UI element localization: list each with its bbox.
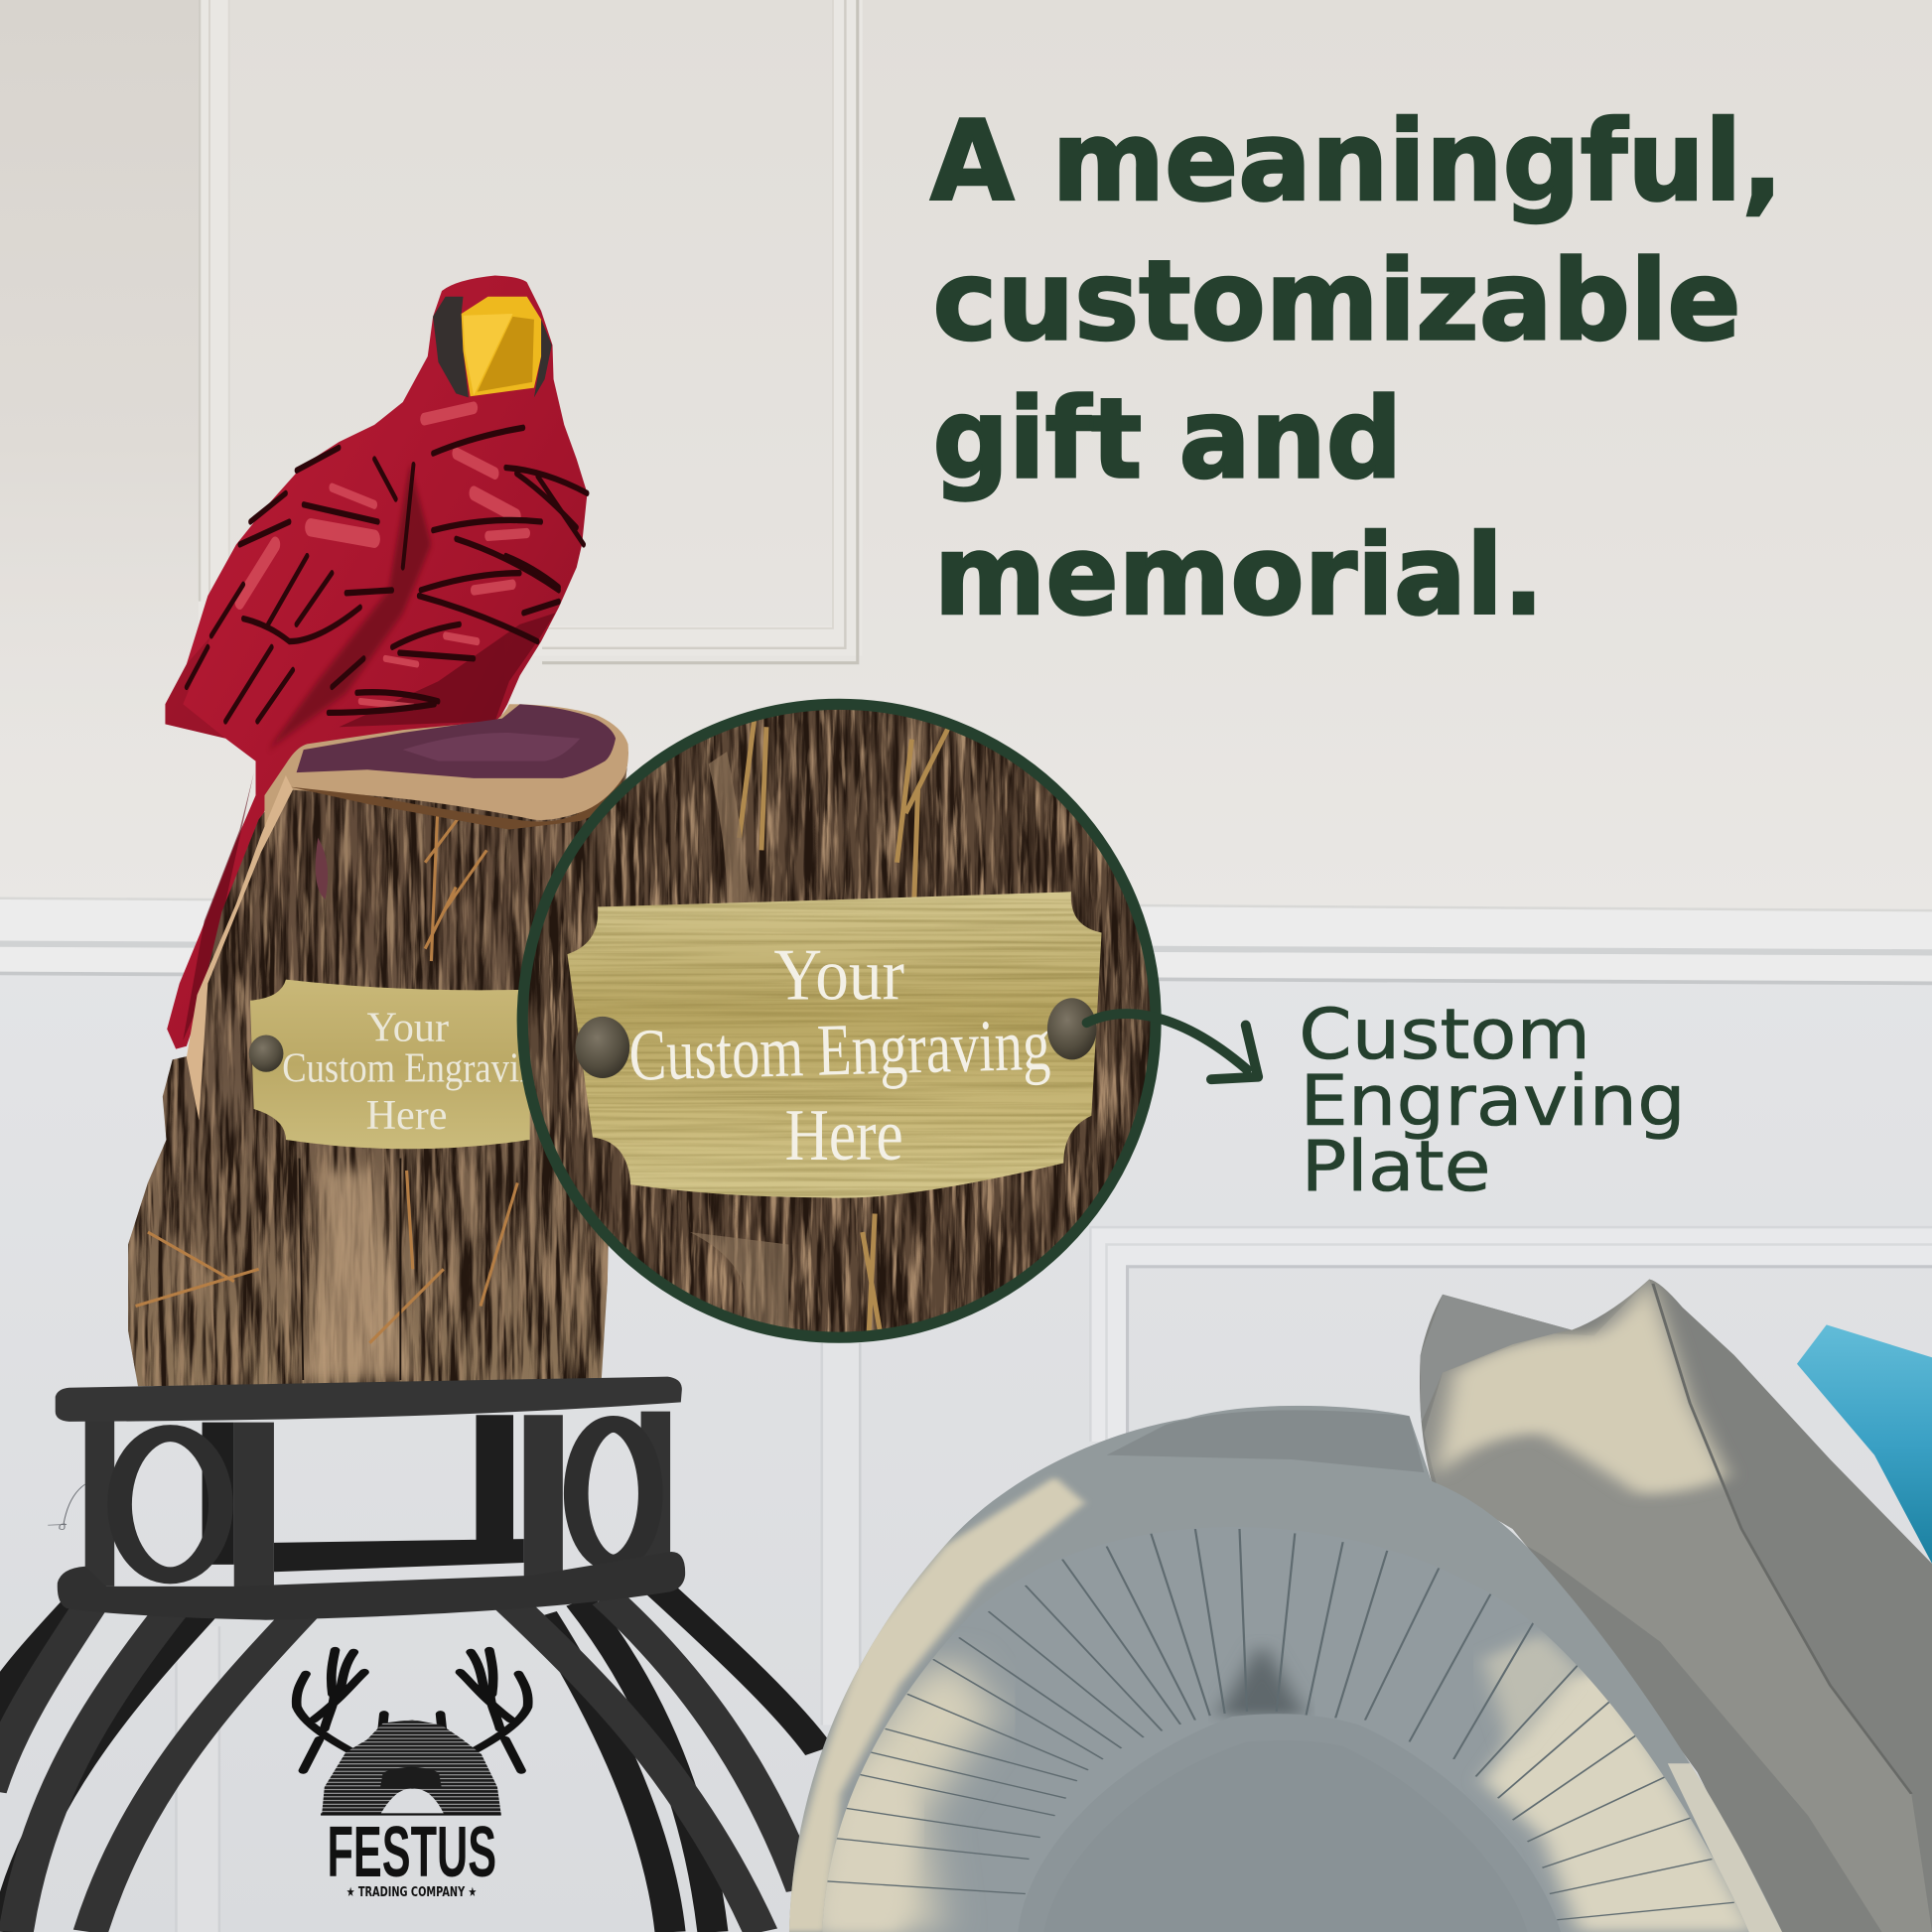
large plate right rivet [1047, 998, 1097, 1059]
carved red cardinal [165, 276, 587, 1049]
sofa pleated ring [822, 1529, 1749, 1932]
large brass plate [554, 888, 1121, 1207]
logo: tagline: ★ TRADING COMPANY ★ [346, 1885, 477, 1900]
stand back legs [0, 1587, 819, 1932]
magnified detail circle [511, 696, 1165, 1349]
stand lower ring [58, 1552, 685, 1620]
logo: wordmark: FESTUS [328, 1813, 496, 1892]
festus trading company logo [297, 1650, 528, 1900]
wall moulding: upper panel frame [200, 0, 858, 663]
logo: antlers [297, 1650, 528, 1770]
sofa arm [774, 1399, 1808, 1932]
sofa centre button panel [1043, 1740, 1528, 1932]
small brass plate on stump [249, 980, 556, 1149]
small plate engraving: Here [366, 1092, 448, 1139]
label: custom engraving plate: Custom [1299, 993, 1590, 1075]
large plate engraving: Custom Engraving [628, 1005, 1051, 1097]
stump cut top [187, 704, 628, 1120]
headline: A meaningful, [930, 97, 1783, 226]
sofa inner piping [1229, 1714, 1557, 1920]
headline: gift and [932, 374, 1402, 503]
stand top plate [56, 1377, 682, 1422]
bird feather cuts [187, 428, 587, 721]
label: custom engraving plate [1299, 993, 1686, 1207]
bird beak [462, 297, 541, 396]
stand stray wire [48, 1484, 85, 1530]
bird highlights [239, 408, 527, 707]
wall moulding: lower panels [176, 1227, 1932, 1932]
label: custom engraving plate: Plate [1302, 1125, 1491, 1207]
arrow to label [1087, 1014, 1258, 1079]
bird face mask [433, 297, 552, 397]
small plate rivet [249, 1035, 283, 1072]
headline: customizable [932, 236, 1741, 365]
small plate engraving [282, 1005, 556, 1139]
large plate engraving: Your [773, 935, 904, 1017]
headline [930, 97, 1783, 640]
tree stump base [123, 704, 640, 1392]
stand uprights [85, 1412, 670, 1590]
small plate engraving: Your [367, 1005, 449, 1051]
logo: turkey fan [322, 1720, 501, 1815]
label: custom engraving plate: Engraving [1300, 1059, 1686, 1142]
teal pillow [1797, 1324, 1932, 1564]
bird shading [165, 465, 555, 1040]
small plate engraving: Custom Engraving [282, 1045, 556, 1092]
stand front legs [0, 1597, 803, 1932]
wrought iron plant stand [0, 1377, 819, 1932]
large plate engraving: Here [785, 1095, 903, 1176]
large plate engraving [631, 951, 1050, 1160]
grey velvet sofa with pillows [774, 1273, 1932, 1932]
sofa pleat lines [819, 1529, 1734, 1920]
headline: memorial. [934, 511, 1544, 640]
large plate left rivet [576, 1017, 629, 1078]
stand back rails [203, 1415, 524, 1572]
wall moulding: chair rail [0, 897, 1932, 983]
grey and cream pillow [1410, 1273, 1932, 1932]
stand rings [120, 1424, 650, 1576]
